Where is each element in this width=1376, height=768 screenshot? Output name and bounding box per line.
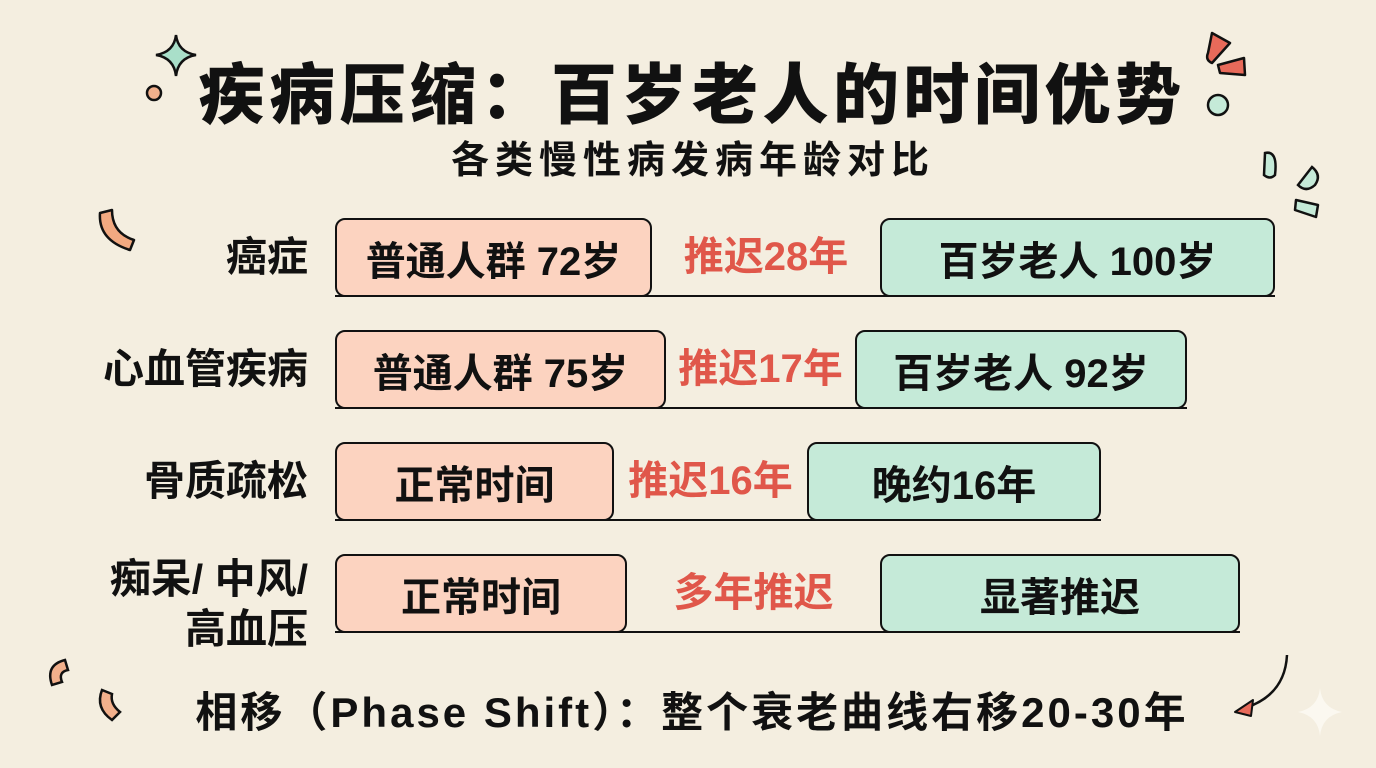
box: normal: 正常时间 — [401, 576, 561, 620]
row: osteoporosis — [335, 442, 1101, 521]
box: normal — [335, 554, 627, 633]
label: dementia etc: 痴呆/ 中风/ — [110, 556, 308, 602]
box: normal: 正常时间 — [394, 464, 554, 508]
decorations: top left — [146, 34, 196, 102]
box: normal: 普通人群 75岁 — [373, 352, 628, 396]
box: centenarian: 百岁老人 100岁 — [939, 240, 1216, 284]
label: osteoporosis: 骨质疏松 — [144, 458, 308, 504]
delay text: 多年推迟 — [674, 571, 834, 615]
label: cancer: 癌症 — [226, 234, 308, 280]
box: significant — [880, 554, 1240, 633]
box: normal: 普通人群 72岁 — [366, 240, 621, 284]
decorations: bottom right arrow and sparkle — [1234, 655, 1341, 734]
box: centenarian: 百岁老人 92岁 — [893, 352, 1149, 396]
title: 疾病压缩：百岁老人的时间优势 — [198, 58, 1186, 132]
box: centenarian — [855, 330, 1187, 409]
decorations: top right — [1206, 32, 1320, 218]
delay text: 推迟16年 — [628, 459, 793, 503]
box: normal — [335, 442, 614, 521]
label: dementia etc — [110, 556, 308, 652]
box: significant: 显著推迟 — [980, 576, 1140, 620]
box: normal — [335, 218, 652, 297]
subtitle: 各类慢性病发病年龄对比 — [451, 140, 935, 182]
box: normal — [335, 330, 666, 409]
box: later: 晚约16年 — [872, 464, 1036, 508]
box: centenarian — [880, 218, 1275, 297]
row: cardiovascular — [335, 330, 1187, 409]
label: dementia etc: 高血压 — [185, 606, 308, 652]
decorations: left arc — [98, 208, 136, 252]
box: later — [807, 442, 1101, 521]
footer: phase shift: 相移（Phase Shift）：整个衰老曲线右移20-30年 — [195, 689, 1189, 736]
row: cancer — [335, 218, 1275, 297]
decorations: bottom left — [48, 658, 122, 722]
row: dementia etc — [335, 554, 1240, 633]
delay text: 推迟17年 — [678, 347, 843, 391]
label: cardiovascular: 心血管疾病 — [103, 346, 308, 392]
delay text: 推迟28年 — [684, 235, 848, 279]
